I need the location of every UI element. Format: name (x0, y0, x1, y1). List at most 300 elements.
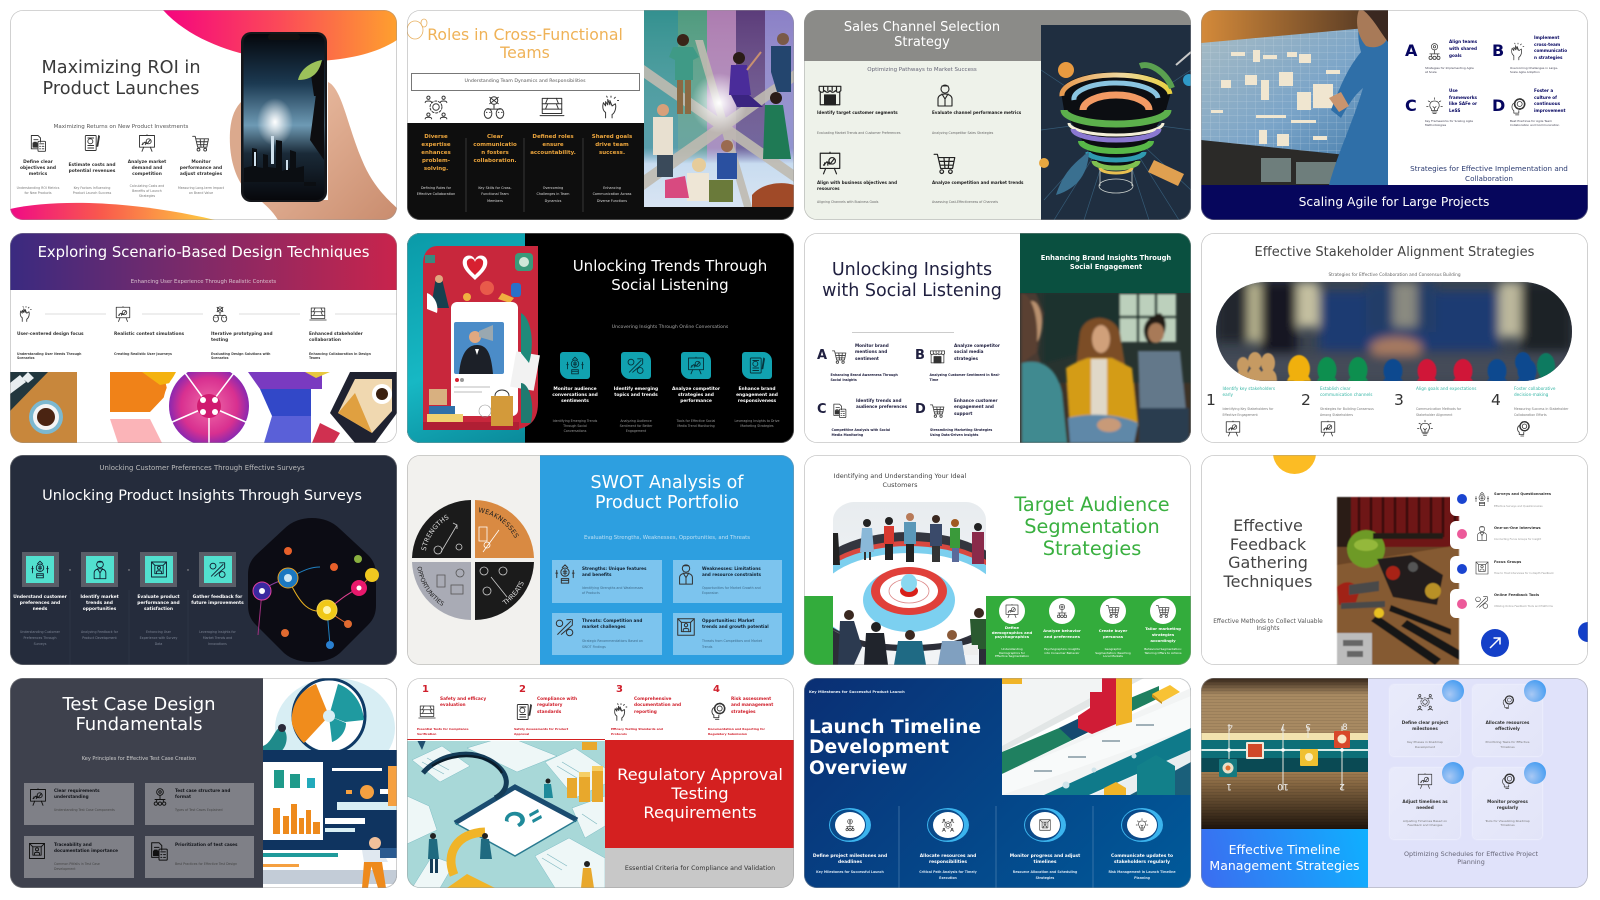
icon tile (199, 552, 236, 587)
heading: milestones (1412, 726, 1438, 730)
note: Local Markets (1103, 654, 1123, 658)
note: Geographic (1105, 647, 1121, 651)
item: iterative (211, 302, 303, 362)
heading: Define clear (23, 160, 53, 165)
item: engagement (727, 352, 787, 436)
title: Product Portfolio (595, 493, 739, 513)
heading: ensure (542, 142, 564, 148)
note: Measuring Long-term Impact (178, 186, 224, 190)
item: competitor (666, 352, 726, 436)
heading: Define project milestones and (813, 854, 887, 858)
number: 4 (713, 684, 720, 694)
note: Time (930, 378, 938, 382)
illustration: audience around target (833, 502, 986, 665)
note: Strategies for Implementing Agile (1425, 66, 1474, 70)
illustration: social media collage (407, 232, 794, 442)
item 4 (708, 680, 794, 736)
heading: Understand customer (13, 595, 67, 600)
note (727, 419, 787, 429)
heading (727, 386, 787, 405)
icon (27, 786, 49, 806)
note: into Consumer Behavior (1045, 651, 1079, 655)
title: Regulatory Approval (617, 764, 783, 784)
note: Resource Allocation and Scheduling (1013, 870, 1077, 874)
heading (530, 134, 576, 156)
card: Test Case Design Fundamentals (10, 678, 397, 888)
heading: strategies (954, 356, 978, 360)
heading: preferences and (20, 601, 60, 606)
icon (1004, 603, 1020, 619)
item: user-centered (17, 302, 109, 362)
heading: testing (211, 338, 228, 343)
illustration: wooden timeline: 2 (1339, 780, 1345, 790)
heading: Analyze competitor (672, 386, 720, 392)
heading: Identify key stakeholders (1222, 386, 1275, 390)
note (606, 419, 666, 435)
quadrant: threats (475, 562, 534, 620)
note: Timelines (1500, 745, 1515, 749)
card: Scaling Agile for Large Projects (1201, 10, 1588, 220)
card: Roles in Cross-Functional Teams (407, 10, 794, 220)
panel: green header (1020, 232, 1191, 292)
heading: goals (1449, 53, 1462, 58)
note: Leveraging Insights for (199, 630, 236, 634)
note: Identifying Strengths and Weaknesses (582, 586, 643, 590)
note: SWOT Findings (582, 645, 606, 649)
note (702, 639, 811, 651)
heading (606, 386, 666, 399)
heading (54, 842, 164, 854)
note: Calculating Costs and (130, 184, 164, 188)
note: Using Data-Driven Insights (930, 432, 978, 436)
subtitle: Unlocking Customer Preferences Through Effective Surveys (99, 464, 305, 472)
note: Key Phases in Roadmap (1407, 740, 1443, 744)
heading: strategies (731, 710, 756, 715)
heading: Adjust timelines as (1402, 798, 1448, 804)
note (178, 186, 224, 195)
subtitle: Insights (1256, 626, 1280, 632)
item: realistic (114, 302, 206, 362)
illustration: man at planning board (1201, 10, 1588, 220)
heading (20, 160, 56, 177)
title: Development (809, 737, 949, 758)
heading (900, 854, 996, 866)
note: Timelines (1500, 823, 1515, 827)
panel: gradient header (10, 232, 397, 290)
note (987, 648, 1037, 659)
item: objectives (16, 135, 60, 195)
icon: person (933, 82, 957, 108)
quadrant: opportunities (412, 562, 471, 620)
note (309, 352, 397, 360)
note: Analyzing Customer Sentiment in Real- (930, 372, 1000, 376)
heading: Clear requirements (54, 788, 100, 792)
panel: teal left band (407, 232, 525, 442)
icon (554, 563, 576, 585)
box: threats (552, 613, 662, 655)
box: prioritization (145, 836, 254, 878)
heading: collaboration (309, 338, 341, 343)
number: 3 (616, 684, 623, 694)
title (0, 694, 289, 736)
icon tile (621, 352, 651, 378)
note: Threats from Competitors and Market (702, 639, 762, 643)
note (1425, 119, 1511, 127)
connector lines (10, 232, 397, 442)
card: Unlocking Insights with Social Listening (804, 232, 1191, 442)
icon disc (1100, 598, 1126, 624)
title (809, 718, 1196, 779)
item: monitor (178, 136, 224, 195)
icon (1425, 41, 1444, 62)
heading: regularly (1497, 804, 1518, 810)
heading (188, 595, 247, 607)
heading (731, 696, 817, 717)
heading: n strategies (1534, 54, 1562, 60)
note: Identifying Key Stakeholders for (1222, 407, 1273, 411)
heading (70, 595, 129, 613)
item: tailor (1138, 598, 1188, 662)
item: performance (129, 552, 188, 648)
icon (708, 700, 728, 720)
icon ring (926, 808, 970, 842)
illustration: node network hexagon (10, 455, 397, 665)
icon: hand (602, 96, 619, 118)
heading: communication channels (1320, 392, 1372, 396)
title: Strategies (1043, 537, 1141, 560)
note (1094, 870, 1190, 881)
heading: and preferences (1044, 634, 1080, 639)
green panel heading: Social Engagement (1070, 262, 1142, 270)
note (1425, 66, 1511, 74)
item: monitor (545, 352, 605, 436)
heading: Align goals and expectations (1416, 386, 1476, 390)
note: Enhancing User (146, 630, 171, 634)
heading (987, 626, 1037, 640)
note (1390, 818, 1460, 828)
note: Development (1415, 745, 1435, 749)
note: Leveraging Insights to Drive (735, 419, 779, 423)
item: competition (932, 150, 1042, 206)
title: Requirements (643, 802, 757, 822)
icon (1499, 770, 1517, 790)
note: Diverse Functions (597, 199, 627, 203)
item: feedback (188, 552, 247, 648)
icon (831, 348, 848, 364)
note (1514, 406, 1600, 418)
heading: demographics and (992, 630, 1032, 635)
heading: Opportunities: Market (702, 618, 754, 623)
illustration: group conversation photo (1020, 293, 1191, 443)
column: updates (1094, 806, 1190, 884)
heading: Align teams (1449, 39, 1477, 44)
icon (626, 354, 646, 376)
note: Key Frameworks for Scaling Agile (1425, 119, 1473, 123)
card: Exploring Scenario-Based Design Techniques (10, 232, 397, 442)
icon (1135, 816, 1149, 832)
item 3 (1394, 384, 1490, 440)
title: Unlocking Insights (832, 260, 992, 280)
note: Enhancing Brand Awareness Through (830, 372, 898, 376)
note: Among Stakeholders (1320, 413, 1353, 417)
item: segments (817, 82, 927, 138)
note: Understanding (1001, 647, 1023, 651)
card: Target Audience Segmentation Strategies (804, 455, 1191, 665)
glass card: adjust (1390, 768, 1460, 838)
illustration: isometric timeline chart (1002, 678, 1191, 795)
note: Assessing Cost-Effectiveness of Channels (932, 200, 998, 204)
icon tile inner (144, 556, 172, 583)
note: Evaluating Market Trends and Customer Preferences (817, 130, 901, 134)
note: Development (54, 867, 75, 871)
note: Tools for Effective Social (677, 419, 715, 423)
title: Product Launches (43, 79, 199, 99)
note: Psychographics: Insights (1044, 647, 1080, 651)
heading: Test case structure and (175, 788, 230, 792)
heading: Align with business objectives and (817, 180, 897, 184)
dot (1457, 494, 1467, 504)
box: opportunities (673, 613, 782, 655)
heading: Diverse (424, 134, 448, 140)
note (666, 419, 726, 429)
heading: documentation importance (54, 848, 118, 853)
number: 4 (1491, 390, 1501, 408)
heading: Analyze behavior (1043, 628, 1081, 633)
note: Streamlining Marketing Strategies (930, 428, 992, 432)
card: Sales Channel Selection Strategy (804, 10, 1191, 220)
note: Social Insights (830, 378, 857, 382)
note (536, 186, 570, 203)
title: Teams (500, 43, 550, 62)
icon: team (424, 96, 448, 120)
quadrant: weaknesses (475, 500, 534, 558)
icon (27, 840, 47, 862)
icon (1508, 96, 1528, 117)
note: Segmentation: Reaching (1095, 651, 1131, 655)
heading: improvement (1534, 108, 1566, 112)
glass card: milestones (1390, 684, 1460, 756)
column: communication (473, 134, 517, 203)
subtitle: Evaluating Strengths, Weaknesses, Opportunities, and Threats (584, 535, 750, 541)
illustration: desk with wheel diagram (10, 372, 397, 443)
heading: Threats: Competition and (582, 618, 642, 623)
heading: effectively (1495, 726, 1520, 730)
item 1 (1206, 384, 1298, 440)
icon: documents (30, 135, 46, 152)
heading (54, 788, 164, 800)
note: Tools for Visualizing Roadmap (1485, 818, 1530, 822)
note: at Scale (1425, 70, 1437, 74)
note (1416, 406, 1512, 418)
heading: engagement and (736, 393, 778, 398)
icon: monitor (817, 150, 843, 176)
heading: Foster collaborative (1514, 386, 1555, 390)
note: Analyzing Competitor Sales Strategies (932, 130, 993, 134)
note: Documentation and Reporting for (708, 726, 765, 730)
heading (817, 180, 927, 192)
box: traceability (24, 836, 134, 878)
heading: Focus Groups (1494, 560, 1521, 564)
heading: User-centered design focus (17, 332, 84, 336)
illustration: wooden timeline: 4 (1227, 720, 1233, 730)
note (478, 186, 512, 203)
heading: understanding (54, 794, 89, 799)
note: Data (155, 642, 162, 646)
heading: communicatio (473, 142, 517, 148)
heading (1514, 386, 1600, 398)
heading (856, 398, 948, 410)
heading: Monitor progress and adjust (1010, 854, 1080, 858)
heading: Implement (1534, 35, 1559, 40)
subtitle: Strategies for Effective Implementation and (1410, 164, 1568, 173)
heading: performance and (137, 601, 180, 606)
note: Utilizing Online Feedback Tools and Platforms (1494, 605, 1553, 608)
note: Media Monitoring (832, 432, 863, 436)
item: preferences (10, 552, 70, 648)
heading: personas (1103, 634, 1123, 639)
subtitle: Effective Methods to Collect Valuable (1213, 618, 1323, 624)
note (417, 726, 509, 736)
heading: Identify emerging (614, 386, 658, 392)
heading (1449, 38, 1535, 59)
heading: documentation and (634, 703, 681, 708)
icon (309, 304, 327, 324)
illustration: wooden timeline: 8 (1342, 722, 1348, 732)
note (1473, 740, 1542, 750)
title (520, 257, 820, 295)
note: for New Products (24, 191, 52, 195)
note: Expansion (702, 591, 718, 595)
heading: Monitor brand (855, 342, 889, 348)
icon (929, 402, 946, 418)
note: Effective Collaboration (417, 192, 455, 196)
heading: Online Feedback Tools (1494, 593, 1539, 597)
heading: success. (599, 150, 625, 156)
divider (852, 332, 954, 333)
title: Sales Channel Selection (844, 20, 1000, 34)
chart: SWOT pie: THREATS (502, 581, 524, 604)
title (942, 494, 1242, 560)
heading: regulatory (537, 703, 562, 708)
note: Key Milestones for Successful Launch (816, 870, 884, 874)
note: Through Social (563, 424, 587, 428)
title (550, 764, 850, 822)
title: Management Strategies (1209, 858, 1360, 873)
card: Maximizing ROI in Product Launches (10, 10, 397, 220)
box: structure (145, 782, 254, 824)
illustration: workshop tools photo (1201, 455, 1588, 665)
note: Teams (309, 356, 320, 360)
illustration: analytics dashboard (10, 678, 397, 888)
heading: Shared goals (592, 134, 632, 140)
heading: sentiment (855, 356, 879, 360)
heading (1222, 386, 1314, 398)
glass card: progress (1473, 768, 1542, 838)
subtitle (1321, 850, 1600, 866)
note: Collaboration Efforts (1514, 413, 1547, 417)
item C (817, 396, 909, 438)
note: Methodologies (1425, 123, 1446, 127)
column: shared goals (592, 134, 632, 203)
heading: and benefits (582, 572, 612, 577)
decoration: rings (407, 18, 428, 40)
heading: resources (817, 186, 840, 191)
column: roles (530, 134, 576, 203)
note: Challenges in Team (537, 192, 569, 196)
title: with Social Listening (822, 281, 1002, 301)
heading: opportunities (83, 607, 116, 612)
icon (1319, 418, 1337, 438)
note: Overcoming Challenges in Large- (1510, 66, 1558, 70)
heading (1088, 628, 1138, 640)
icon ring (1023, 808, 1067, 842)
heading: Compliance with (537, 696, 577, 702)
heading: Identify market (80, 595, 119, 600)
letter: A (1405, 41, 1417, 60)
box: weaknesses (673, 560, 782, 603)
heading: Analyze competition and market trends (932, 180, 1023, 184)
icon (1038, 816, 1052, 832)
note: Understanding User Needs Through (17, 352, 81, 356)
heading: Allocate resources (1486, 720, 1529, 724)
heading: demand and (132, 166, 162, 171)
heading (68, 162, 116, 174)
note: Identifying Emerging Trends (553, 419, 597, 423)
heading: communicatio (1534, 48, 1567, 53)
icon (1499, 694, 1517, 710)
note: Opportunities for Market Growth and (702, 586, 761, 590)
heading: problem- (422, 158, 450, 164)
note (582, 639, 692, 651)
note: Competitive Analysis with Social (832, 428, 890, 432)
box: requirements (24, 782, 134, 824)
heading: Defined roles (532, 134, 574, 140)
note (930, 372, 1028, 382)
heading (582, 566, 692, 578)
icon tile inner (26, 556, 54, 583)
note: Conducting Focus Groups for Insight (1494, 538, 1541, 541)
item 2 (514, 680, 606, 736)
button: arrow circle (1201, 455, 1588, 665)
note: Functional Team (481, 192, 509, 196)
title: Exploring Scenario-Based Design Techniques (38, 244, 369, 260)
heading: topics and trends (614, 393, 658, 398)
icon (565, 354, 585, 376)
heading: reporting (634, 710, 657, 715)
illustration: team on crossing beams (644, 10, 794, 207)
heading: enhances (421, 150, 451, 156)
heading: needs (33, 607, 47, 612)
number: 1 (422, 684, 429, 694)
heading (473, 134, 517, 164)
title: Maximizing ROI in (41, 58, 201, 78)
heading: Tailor marketing (1145, 626, 1181, 631)
note (1138, 648, 1188, 655)
icon tile inner (86, 556, 114, 583)
heading: mentions and (855, 349, 887, 354)
icon ring (1120, 808, 1164, 842)
icon: cart (192, 136, 209, 152)
icon tile (560, 352, 590, 378)
note: Effective Surveys and Questionnaires (1494, 505, 1543, 508)
title: Test Case Design (62, 694, 216, 714)
heading: Create buyer (1099, 628, 1127, 633)
note: Market Trends and (203, 636, 232, 640)
icon tile (681, 352, 711, 378)
heading: Gather feedback for (193, 595, 242, 600)
subtitle box (410, 72, 640, 90)
note: Efficacy Testing Standards and (611, 726, 663, 730)
